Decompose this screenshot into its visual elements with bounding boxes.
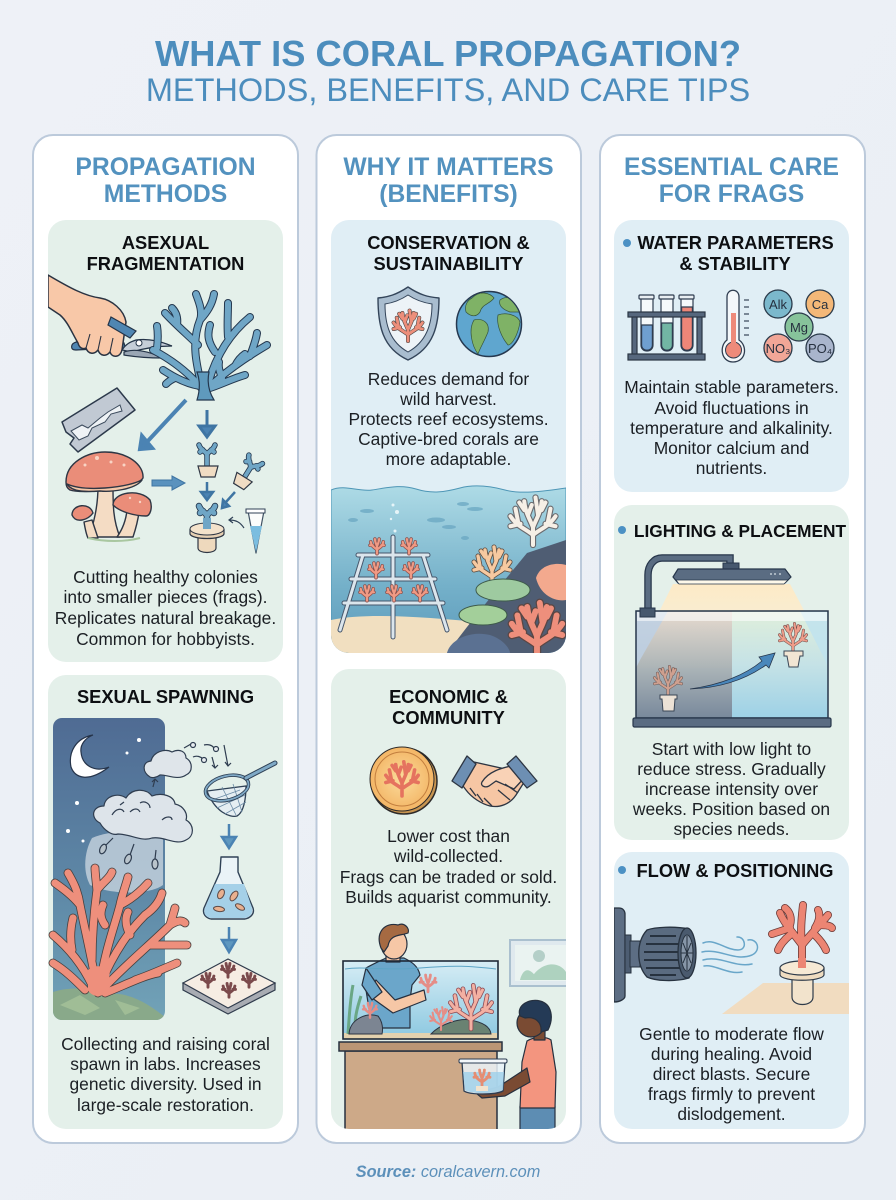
card body text <box>55 567 276 649</box>
card body text: species needs. <box>673 819 790 839</box>
card body text: Captive-bred corals are <box>358 429 539 449</box>
stand <box>339 1042 502 1133</box>
heading: essential care for frags: ESSENTIAL CARE <box>624 154 839 181</box>
arrow: coral down <box>199 410 215 437</box>
card body text: Cutting healthy colonies <box>73 567 258 587</box>
icon: aquarium with light <box>633 558 831 727</box>
card body text: Monitor calcium and <box>654 438 809 458</box>
card heading: & STABILITY <box>679 253 791 274</box>
card body text: large-scale restoration. <box>77 1095 254 1115</box>
card body text <box>348 369 549 469</box>
card body text <box>340 826 557 907</box>
icons: chemical circles: Ca <box>812 297 829 312</box>
icon: small frag <box>198 445 218 477</box>
card heading: LIGHTING & PLACEMENT <box>634 521 847 541</box>
card: conservation and sustainability <box>331 220 566 656</box>
card: lighting and placement <box>614 505 849 840</box>
icon: coral on plug <box>772 905 832 1004</box>
card heading: FRAGMENTATION <box>87 253 244 274</box>
icon: powerhead pump <box>614 908 696 1002</box>
icon: tilted frag <box>231 455 263 491</box>
card: economic and community <box>331 669 570 1136</box>
card body text: Replicates natural breakage. <box>55 608 276 628</box>
flow lines <box>702 937 758 973</box>
card body text: nutrients. <box>696 458 767 478</box>
heading: essential care for frags: FOR FRAGS <box>659 181 804 208</box>
night scene <box>53 718 165 1020</box>
card heading: CONSERVATION & <box>367 232 530 253</box>
card body text: Collecting and raising coral <box>61 1034 270 1054</box>
community scene <box>339 924 570 1136</box>
card heading: ECONOMIC & <box>389 686 508 707</box>
heading: why it matters <box>343 154 554 208</box>
card: water parameters <box>614 220 849 492</box>
card body text: Gentle to moderate flow <box>639 1024 824 1044</box>
source footer: Source: coralcavern.com <box>356 1163 540 1181</box>
card body text: more adaptable. <box>386 449 511 469</box>
card body text: weeks. Position based on <box>632 799 830 819</box>
icon: moon <box>70 735 109 777</box>
card: flow and positioning <box>614 852 849 1129</box>
card body text: Reduces demand for <box>368 369 529 389</box>
card heading: FLOW & POSITIONING <box>636 860 834 881</box>
icon: hand with shears <box>48 275 172 358</box>
coral in low light <box>654 666 682 711</box>
framed picture <box>510 940 570 986</box>
title: METHODS, BENEFITS, AND CARE TIPS <box>146 72 750 108</box>
reef restoration scene <box>331 486 566 656</box>
icon: test tube <box>229 509 265 553</box>
arrow: mushroom to frag <box>152 476 185 490</box>
card body text <box>624 377 839 478</box>
card body text <box>632 739 830 839</box>
icon: coral nursery rack <box>340 537 447 637</box>
card heading: ASEXUAL <box>122 232 209 253</box>
heading: propagation methods <box>75 154 256 208</box>
bullet dot <box>618 866 626 874</box>
card heading: SEXUAL SPAWNING <box>77 686 254 707</box>
arrow: coral to mushroom <box>140 400 186 449</box>
bucket with coral <box>459 1059 507 1094</box>
card body text: spawn in labs. Increases <box>70 1054 261 1074</box>
card body text: wild harvest. <box>399 389 497 409</box>
bullet dot <box>623 239 631 247</box>
card body text: reduce stress. Gradually <box>637 759 826 779</box>
heading: essential care for frags <box>624 154 839 208</box>
card body text: increase intensity over <box>645 779 818 799</box>
icon: handshake <box>452 756 537 807</box>
card body text <box>61 1034 270 1115</box>
icon: razor blade <box>62 388 135 452</box>
card heading: WATER PARAMETERS <box>637 232 834 253</box>
arrow: net to flask <box>222 824 236 848</box>
title: WHAT IS CORAL PROPAGATION? <box>155 33 741 74</box>
icon: frag on plug <box>190 506 224 552</box>
card heading <box>367 232 530 274</box>
icon: red coral <box>53 868 187 996</box>
card: asexual fragmentation <box>48 220 283 662</box>
person child <box>476 1000 556 1136</box>
icon: table ledge <box>722 983 849 1014</box>
card body text: frags firmly to prevent <box>648 1084 815 1104</box>
card body text: Protects reef ecosystems. <box>348 409 549 429</box>
card heading: SUSTAINABILITY <box>374 253 523 274</box>
card: sexual spawning <box>48 675 283 1129</box>
icon: flask <box>203 857 253 919</box>
card body text: dislodgement. <box>677 1104 786 1124</box>
heading: why it matters: (BENEFITS) <box>379 181 518 208</box>
icons: chemical circles: PO₄ <box>808 341 832 356</box>
card body text: direct blasts. Secure <box>653 1064 810 1084</box>
card body text: genetic diversity. Used in <box>69 1074 262 1094</box>
card body text <box>639 1024 824 1124</box>
icon: test tubes in rack <box>628 295 705 360</box>
icons: chemical circles <box>764 290 834 362</box>
icon: coin <box>370 747 437 814</box>
bullet dot <box>618 526 626 534</box>
heading: propagation methods: PROPAGATION <box>75 154 256 181</box>
panel: essential care <box>600 135 865 1143</box>
coral in bright light <box>780 624 806 667</box>
person adult <box>362 924 426 1028</box>
card body text: wild-collected. <box>393 846 503 866</box>
icon: mushroom coral <box>66 452 151 541</box>
card body text: Avoid fluctuations in <box>654 398 809 418</box>
card heading <box>637 232 834 274</box>
card body text: during healing. Avoid <box>651 1044 812 1064</box>
icon: collection net <box>203 763 275 816</box>
arrow: flask to tile <box>222 927 236 952</box>
icons: chemical circles: NO₃ <box>766 341 790 356</box>
arrow: tilted frag to plug <box>222 492 235 508</box>
arrow: move coral up <box>690 653 775 689</box>
icons: chemical circles: Alk <box>769 297 788 312</box>
panel: why it matters <box>316 135 581 1143</box>
panel: propagation methods <box>33 135 298 1143</box>
title <box>146 33 750 108</box>
aquarium water <box>343 961 498 1039</box>
heading: why it matters: WHY IT MATTERS <box>343 154 554 181</box>
icon: shield with coral <box>378 287 439 360</box>
card body text: Frags can be traded or sold. <box>340 867 557 887</box>
heading: propagation methods: METHODS <box>104 181 227 208</box>
icon: thermometer <box>722 290 749 362</box>
card heading: COMMUNITY <box>392 707 505 728</box>
icon: blue coral <box>153 294 267 400</box>
card body text: Lower cost than <box>387 826 510 846</box>
aquarium contents and frame <box>343 961 498 1039</box>
arrow: frag down <box>201 482 213 500</box>
icon: spawn clouds <box>94 750 192 842</box>
icon: globe <box>456 292 522 356</box>
icon: tile with settled coral <box>183 959 275 1014</box>
card body text: temperature and alkalinity. <box>630 418 833 438</box>
card heading <box>389 686 508 728</box>
card body text: Maintain stable parameters. <box>624 377 839 397</box>
card body text: Start with low light to <box>652 739 811 759</box>
spawn drifting and falling <box>98 742 231 869</box>
icons: chemical circles: Mg <box>790 320 808 335</box>
card body text: Common for hobbyists. <box>76 629 255 649</box>
card body text: into smaller pieces (frags). <box>64 587 267 607</box>
card heading <box>87 232 244 274</box>
card body text: Builds aquarist community. <box>345 887 552 907</box>
